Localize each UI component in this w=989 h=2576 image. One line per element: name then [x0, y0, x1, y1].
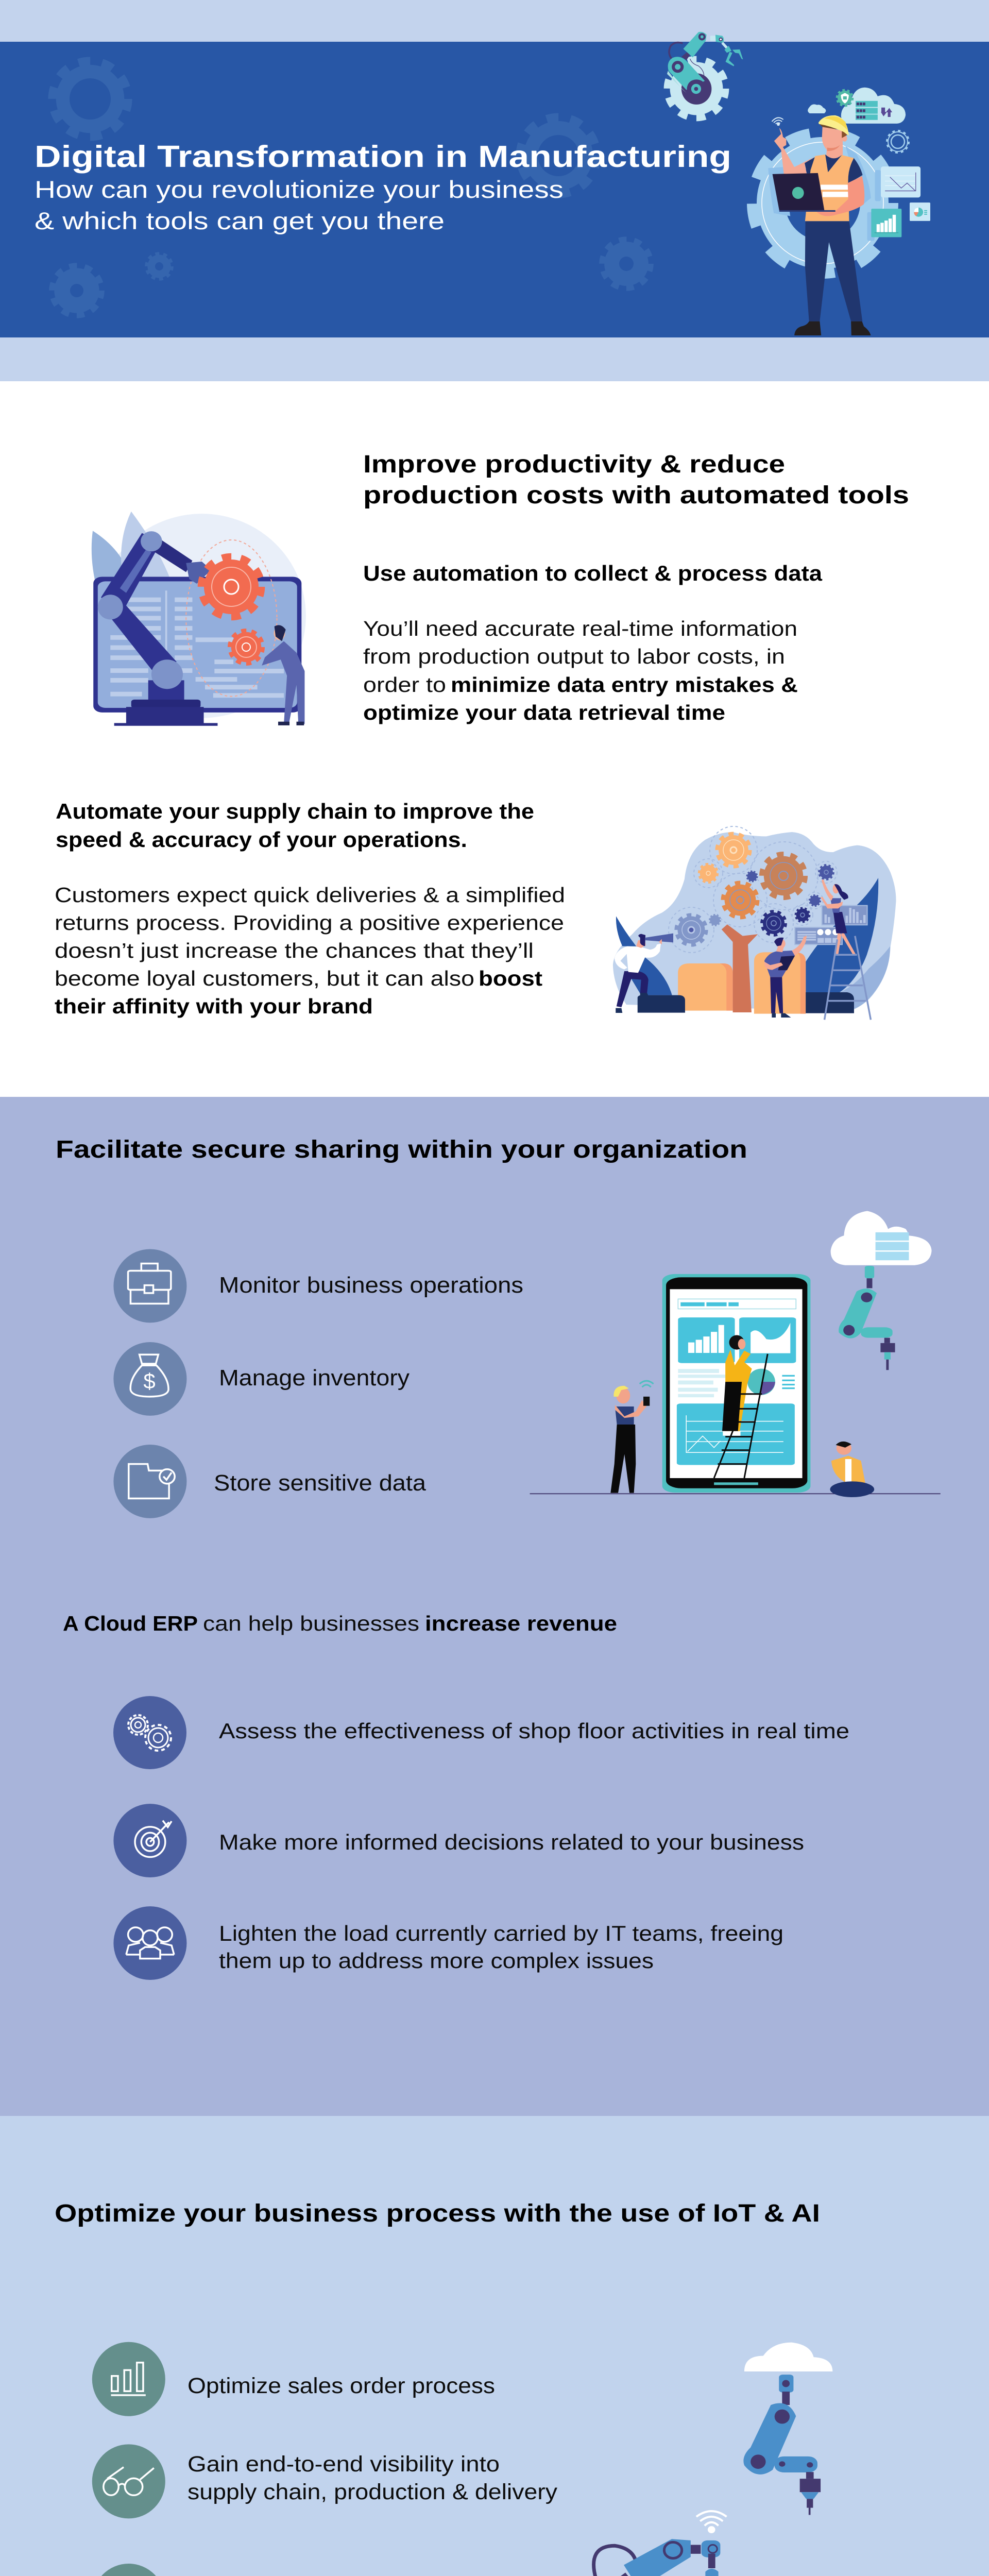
- text block: accurate information: minimize data entry mistakes &: [451, 673, 798, 697]
- text block: customer expectations: their affinity with your brand: [55, 994, 373, 1018]
- item: manage inventory: Manage inventory: [219, 1365, 410, 1391]
- subheading: cloud erp: [63, 1612, 617, 1635]
- item: sales order: Optimize sales order process: [187, 2374, 495, 2398]
- item: informed decisions: Make more informed decisions related to your business: [219, 1830, 804, 1854]
- subheading: cloud erp: can help businesses: [203, 1612, 419, 1635]
- text block: accurate information: optimize your data retrieval time: [363, 701, 725, 724]
- item: end-to-end visibility: Gain end-to-end visibility into: [187, 2452, 500, 2477]
- item: end-to-end visibility: [92, 2444, 558, 2518]
- heading: automate supply chain: speed & accuracy of your operations.: [56, 827, 467, 852]
- item: identify issues: [92, 2564, 501, 2576]
- text block: accurate information: from production output to labor costs, in: [363, 645, 785, 668]
- icon: glasses: [92, 2444, 165, 2518]
- subtitle: & which tools can get you there: [35, 207, 445, 234]
- icon: target: [113, 1804, 186, 1877]
- background gears: [52, 61, 651, 315]
- heading: improve productivity: Improve productivity & reduce: [363, 451, 785, 478]
- illustration: engineer with laptop: [752, 88, 930, 335]
- subheading: use automation: Use automation to collect & process data: [363, 561, 823, 585]
- icon: globe with magnifier: [92, 2564, 165, 2576]
- item: lighten the load: [113, 1906, 783, 1980]
- heading: automate supply chain: Automate your supply chain to improve the: [56, 799, 534, 823]
- icon: bar chart: [92, 2342, 165, 2416]
- panel: hero banner: [0, 0, 989, 381]
- illustration: phone dashboard with workers: [530, 1211, 941, 1497]
- heading: automate supply chain: [56, 799, 534, 852]
- text block: accurate information: You’ll need accurate real-time information: [363, 617, 797, 640]
- text block: customer expectations: boost: [479, 967, 542, 990]
- item: store sensitive data: [113, 1445, 427, 1518]
- heading: optimize business process: Optimize your business process with the use of IoT & AI: [55, 2200, 820, 2227]
- item: sales order: [92, 2342, 495, 2416]
- item: manage inventory: $: [143, 1369, 156, 1393]
- people: [615, 879, 871, 1020]
- item: lighten the load: Lighten the load currently carried by IT teams, freeing: [219, 1921, 783, 1945]
- panel: secure sharing section: [0, 1097, 989, 2116]
- icon: gears: [113, 1696, 186, 1769]
- icon: briefcase: [113, 1249, 186, 1323]
- subheading: cloud erp: increase revenue: [425, 1612, 617, 1635]
- item: monitor business operations: Monitor business operations: [219, 1273, 523, 1298]
- subtitle: [35, 176, 564, 234]
- heading: facilitate secure sharing: Facilitate secure sharing within your organization: [56, 1136, 747, 1163]
- text block: customer expectations: Customers expect quick deliveries & a simplified: [55, 883, 565, 907]
- gears: [669, 826, 837, 953]
- subheading: cloud erp: A Cloud ERP: [63, 1612, 198, 1635]
- item: assess effectiveness: Assess the effectiveness of shop floor activities in real time: [219, 1719, 849, 1743]
- item: manage inventory: [113, 1342, 410, 1416]
- panel: automation section: [0, 381, 989, 1097]
- illustration: gears tree with team: [613, 826, 896, 1020]
- text block: customer expectations: doesn’t just increase the chances that they’ll: [55, 939, 534, 962]
- title: Digital Transformation in Manufacturing: [35, 140, 731, 174]
- item: end-to-end visibility: supply chain, production & delivery: [187, 2480, 558, 2504]
- item: store sensitive data: Store sensitive data: [214, 1470, 427, 1496]
- text block: customer expectations: [55, 883, 565, 1018]
- icon: team: [113, 1906, 186, 1980]
- item: lighten the load: them up to address more complex issues: [219, 1948, 654, 1973]
- item: assess effectiveness: [113, 1696, 849, 1769]
- item: monitor business operations: [113, 1249, 523, 1323]
- subtitle: How can you revolutionize your business: [35, 176, 564, 203]
- icon: money bag: [113, 1342, 186, 1416]
- text block: customer expectations: returns process. Providing a positive experience: [55, 911, 564, 935]
- heading: improve productivity: [363, 451, 909, 509]
- item: informed decisions: [113, 1804, 804, 1877]
- text block: customer expectations: become loyal customers, but it can also: [55, 967, 474, 990]
- panel: IoT and AI section: [0, 2116, 989, 2576]
- heading: improve productivity: production costs with automated tools: [363, 482, 909, 509]
- illustration: robot arm with gear: [667, 32, 743, 118]
- icon: folder with check: [113, 1445, 186, 1518]
- illustration: robot arm on conveyor with worker: [580, 2343, 933, 2576]
- text block: accurate information: [363, 617, 798, 724]
- illustration: robot arm at monitor: [92, 512, 306, 726]
- text block: accurate information: order to: [363, 673, 446, 697]
